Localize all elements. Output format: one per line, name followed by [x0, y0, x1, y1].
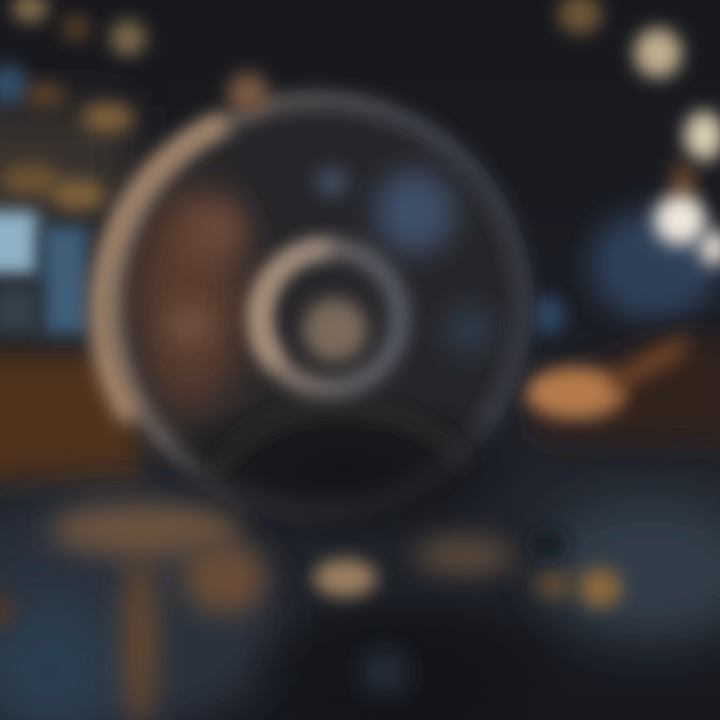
inner ring: [260, 248, 400, 388]
floor: warm orange reflections: [0, 504, 622, 720]
wheel lower arc: [215, 408, 465, 470]
wheel top knob: [227, 73, 269, 113]
background: right side lights and blue wall: [532, 0, 720, 335]
wheel blue sector: [375, 170, 455, 254]
wheel outer rim: [113, 100, 523, 510]
wheel bright left rim: [100, 122, 225, 420]
inner ring bright left arc: [260, 248, 330, 365]
background: left hall with lights and brown band: [0, 0, 146, 480]
background: right orange streak: [525, 335, 720, 445]
hub: [303, 298, 367, 362]
wheel: [100, 73, 545, 550]
floor: dark blue mottled ground: [0, 500, 720, 720]
wheel left brown sector: [135, 185, 245, 415]
wheel lower shadow: [145, 390, 545, 550]
wheel disc: [113, 100, 523, 510]
